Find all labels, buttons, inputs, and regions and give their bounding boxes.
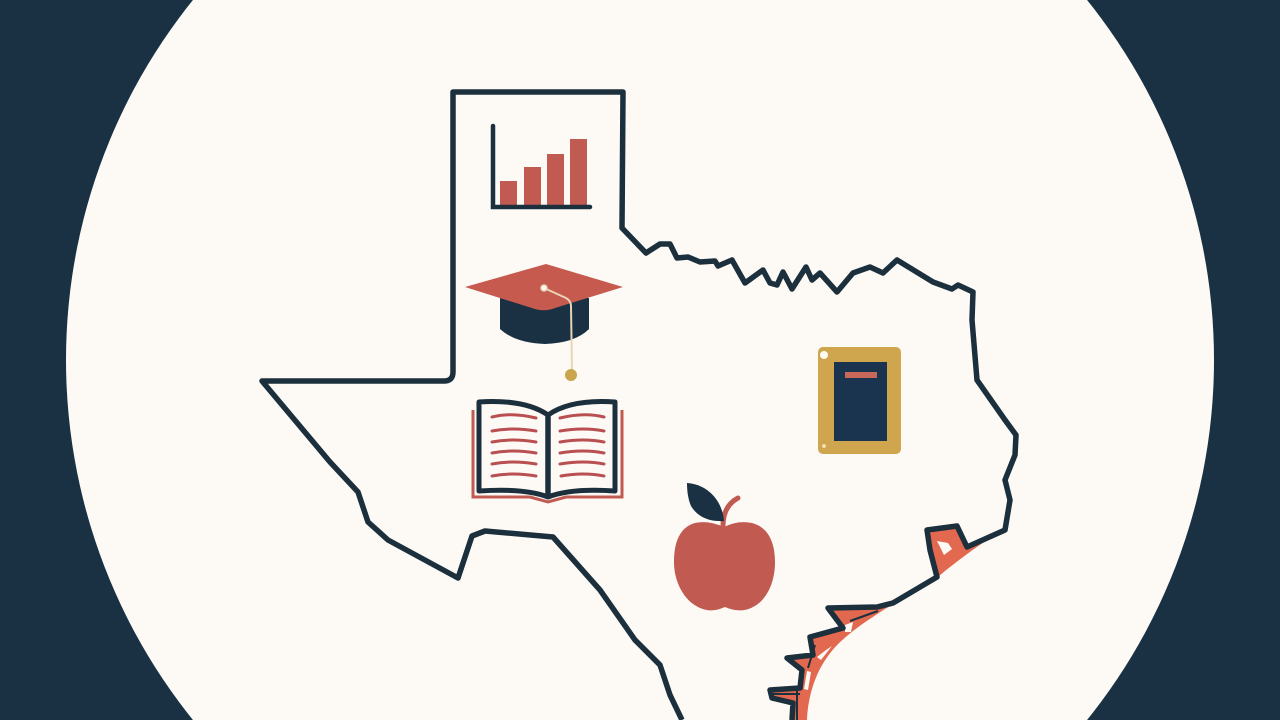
icon: open book xyxy=(473,402,622,502)
coastal red detail xyxy=(770,527,1000,720)
icon: graduation cap xyxy=(465,264,623,381)
icon: bar chart xyxy=(493,126,590,207)
icon: apple xyxy=(674,483,775,610)
icon: notebook xyxy=(818,347,901,454)
Texas state outline xyxy=(262,92,1016,720)
